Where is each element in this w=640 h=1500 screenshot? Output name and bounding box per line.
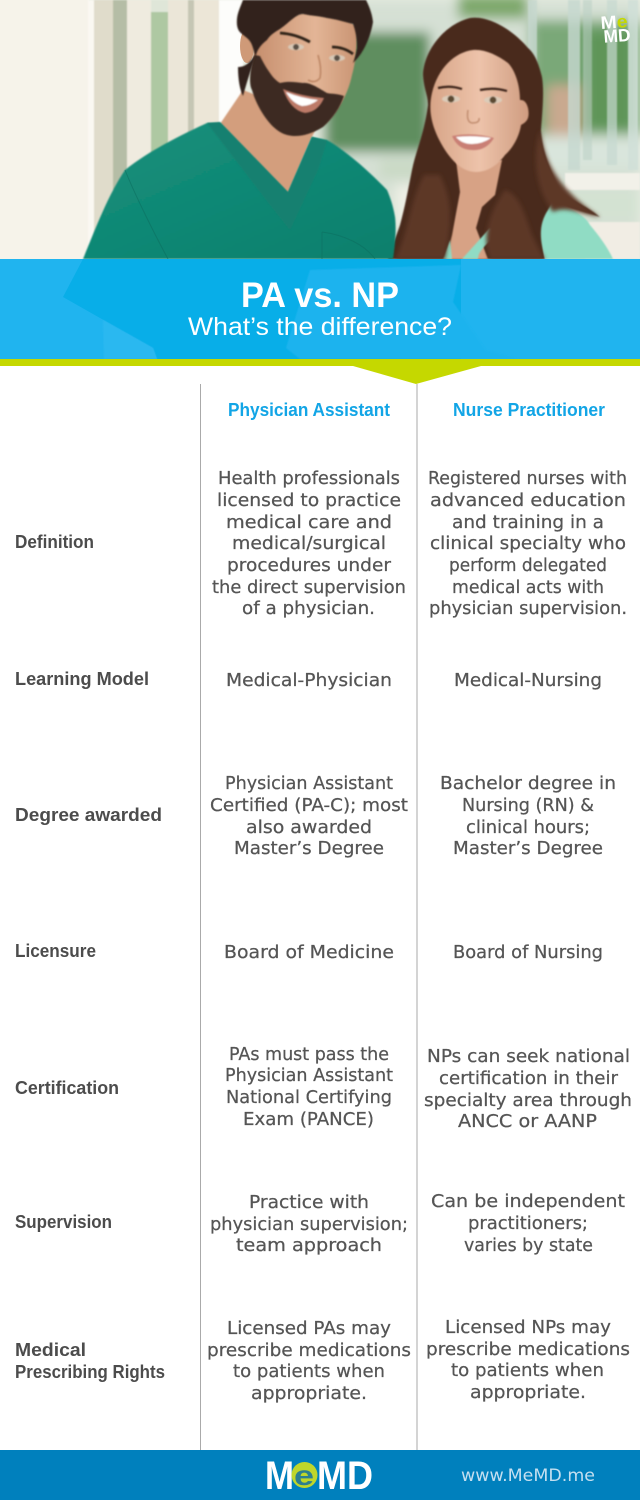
PA definition text — [212, 468, 406, 619]
PA definition text: of a physician. — [242, 598, 375, 619]
NP certification: certification in their — [439, 1068, 619, 1089]
NP prescribing rights — [426, 1317, 630, 1403]
NP certification — [424, 1046, 632, 1132]
NP definition text — [428, 468, 627, 619]
man's scrub top — [83, 123, 396, 259]
NP prescribing rights: to patients when — [451, 1360, 604, 1381]
footer logo: MeMD: e — [294, 1460, 314, 1491]
NP degree: Master’s Degree — [453, 838, 603, 859]
NP supervision: varies by state — [464, 1235, 593, 1256]
column divider: left — [200, 384, 201, 1450]
PA definition text: Health professionals — [218, 468, 400, 489]
column divider: right — [416, 384, 418, 1450]
PA degree: also awarded — [246, 817, 372, 838]
NP definition text: clinical specialty who — [430, 533, 626, 554]
woman's scrub top — [443, 201, 613, 259]
NP prescribing rights: prescribe medications — [426, 1339, 630, 1360]
column heading: Physician Assistant: Physician Assistant — [228, 400, 390, 420]
PA supervision: Practice with — [249, 1192, 369, 1213]
PA certification: Physician Assistant — [225, 1065, 393, 1086]
PA supervision — [210, 1192, 408, 1256]
NP learning model: Medical-Nursing — [454, 670, 602, 691]
man's mouth — [283, 89, 324, 113]
row label: Licensure: Licensure — [15, 940, 96, 961]
woman's face — [430, 50, 529, 172]
PA definition text: medical/surgical — [232, 533, 386, 554]
PA degree: Physician Assistant — [225, 773, 393, 794]
man's ear — [240, 33, 254, 63]
footer logo: MeMD: MD — [317, 1454, 373, 1498]
man's hair — [237, 0, 373, 96]
PA certification — [225, 1044, 393, 1130]
woman's hair locks, front — [395, 130, 600, 259]
row label: Medical Prescribing Rights — [15, 1339, 165, 1382]
row label: Medical Prescribing Rights: Prescribing Rights — [15, 1361, 165, 1382]
man's face — [252, 14, 357, 118]
footer bar — [0, 1450, 640, 1500]
PA prescribing rights: Licensed PAs may — [227, 1318, 391, 1339]
PA degree — [210, 773, 408, 859]
NP supervision: practitioners; — [468, 1213, 588, 1234]
scrub collar band — [207, 122, 327, 230]
PA supervision: team approach — [236, 1235, 382, 1256]
footer logo: MeMD — [265, 1454, 373, 1498]
NP certification: ANCC or AANP — [458, 1111, 597, 1132]
PA definition text: medical care and — [226, 512, 392, 533]
PA prescribing rights: prescribe medications — [207, 1340, 411, 1361]
row label: Learning Model: Learning Model — [15, 668, 149, 689]
PA degree: Master’s Degree — [234, 838, 384, 859]
NP definition text: and training in a — [452, 512, 604, 533]
NP definition text: advanced education — [430, 490, 626, 511]
man's neck — [220, 90, 320, 194]
footer website address: www.MeMD.me — [461, 1466, 595, 1486]
row label: Medical Prescribing Rights: Medical — [15, 1339, 86, 1360]
subtitle: What’s the difference? — [188, 313, 452, 341]
PA degree: Certified (PA-C); most — [210, 795, 408, 816]
blue title band — [0, 259, 640, 359]
NP degree: clinical hours; — [466, 817, 590, 838]
PA prescribing rights — [207, 1318, 411, 1404]
PA prescribing rights: appropriate. — [251, 1383, 367, 1404]
NP definition text: Registered nurses with — [428, 468, 627, 489]
NP certification: specialty area through — [424, 1090, 632, 1111]
column heading: Nurse Practitioner: Nurse Practitioner — [453, 400, 605, 420]
NP definition text: medical acts with — [452, 577, 604, 598]
NP certification: NPs can seek national — [427, 1046, 630, 1067]
logo: small MeMD mark on photo: Me — [600, 11, 628, 33]
row label: Certification: Certification — [15, 1077, 119, 1098]
title: PA vs. NP — [241, 276, 399, 315]
PA prescribing rights: to patients when — [233, 1361, 385, 1382]
NP definition text: physician supervision. — [429, 598, 627, 619]
green divider with pointer — [0, 359, 640, 384]
man's beard — [250, 55, 344, 136]
NP supervision: Can be independent — [431, 1191, 625, 1212]
man's eyes and brows — [280, 33, 353, 82]
PA learning model: Medical-Physician — [226, 670, 392, 691]
woman's hair, back — [388, 18, 600, 259]
woman's neck and chest — [446, 160, 502, 259]
PA definition text: the direct supervision — [212, 577, 406, 598]
photo: two clinicians in scrubs — [0, 0, 640, 262]
PA supervision: physician supervision; — [210, 1214, 408, 1235]
row label: Definition: Definition — [15, 531, 94, 552]
PA certification: National Certifying — [226, 1087, 392, 1108]
logo: small MeMD mark on photo — [600, 11, 631, 47]
NP degree: Bachelor degree in — [440, 773, 616, 794]
PA certification: PAs must pass the — [229, 1044, 389, 1065]
NP definition text: perform delegated — [449, 555, 607, 576]
sleeve seam and pocket — [125, 170, 375, 259]
woman's eyes, brows and smile — [438, 87, 507, 150]
NP degree: Nursing (RN) & — [462, 795, 594, 816]
PA licensure: Board of Medicine — [224, 942, 394, 963]
NP prescribing rights: appropriate. — [470, 1382, 586, 1403]
footer logo: MeMD: M — [265, 1454, 294, 1498]
row label: Degree awarded: Degree awarded — [15, 804, 162, 825]
PA definition text: licensed to practice — [217, 490, 401, 511]
PA definition text: procedures under — [227, 555, 392, 576]
NP supervision — [431, 1191, 625, 1256]
photo background: wall, window and garden — [0, 0, 640, 262]
NP prescribing rights: Licensed NPs may — [445, 1317, 611, 1338]
logo: small MeMD mark on photo: MD — [603, 25, 631, 47]
NP licensure: Board of Nursing — [453, 942, 603, 963]
PA certification: Exam (PANCE) — [243, 1109, 374, 1130]
row label: Supervision: Supervision — [15, 1211, 112, 1232]
NP degree — [440, 773, 616, 859]
